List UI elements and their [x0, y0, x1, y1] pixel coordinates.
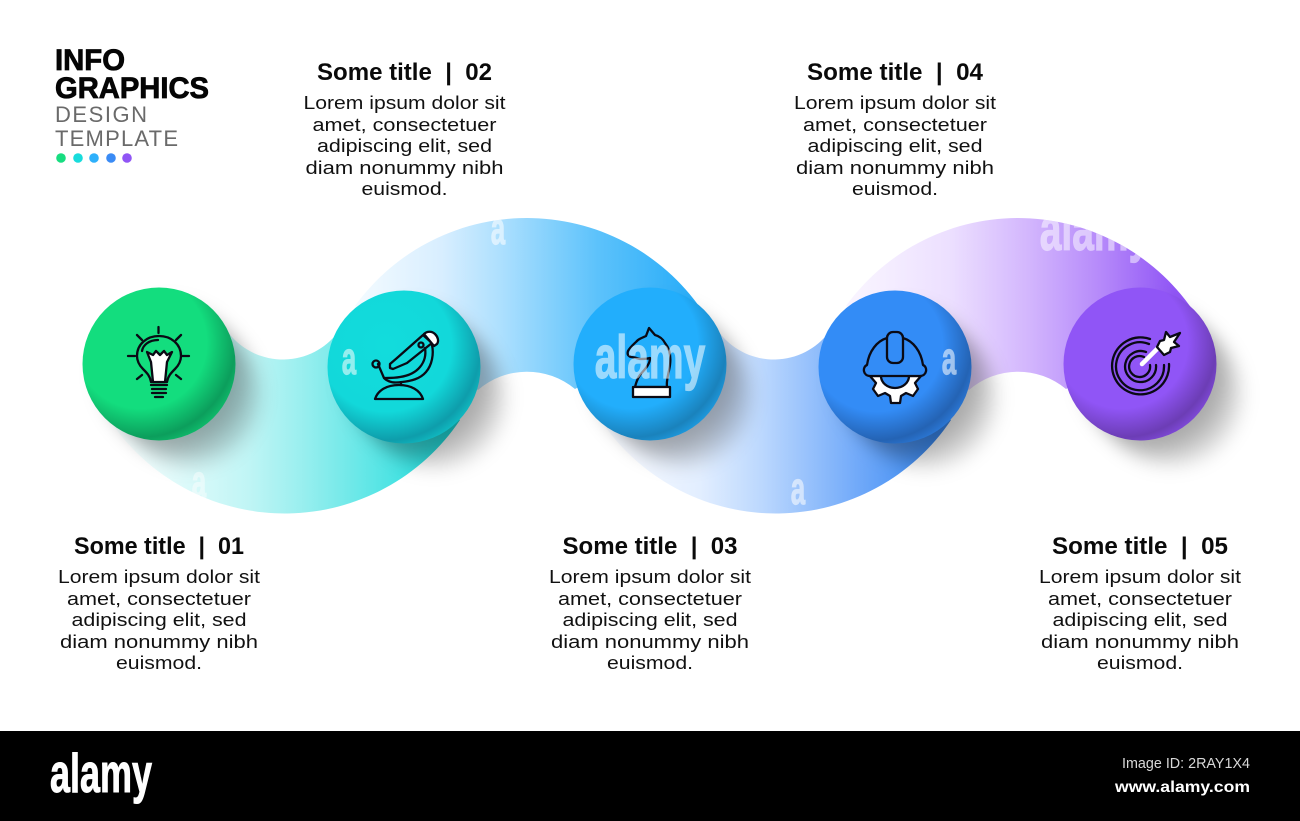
colour dots — [56, 153, 132, 163]
step text 01: euismod. — [116, 653, 202, 673]
watermark overlays: alamy — [595, 323, 705, 391]
step text 01: Lorem ipsum dolor sit — [58, 567, 260, 587]
step text 01: Some title | 01 — [74, 533, 244, 560]
step text 04: Lorem ipsum dolor sit — [794, 93, 996, 113]
step 3 circle with chess knight — [574, 288, 726, 440]
step text 05 — [1039, 533, 1241, 673]
step text 02: amet, consectetuer — [312, 115, 496, 135]
step text 04: adipiscing elit, sed — [808, 136, 982, 156]
step 2 circle with microscope — [328, 290, 480, 444]
icon: helmet and gear — [864, 332, 926, 403]
step text 01: diam nonummy nibh — [60, 632, 258, 652]
step text 05: Some title | 05 — [1052, 533, 1228, 560]
step text 02: Lorem ipsum dolor sit — [304, 93, 506, 113]
wave band 4 purple — [846, 218, 1196, 390]
step text 01 — [58, 533, 260, 673]
step text 03: amet, consectetuer — [558, 589, 742, 609]
step 1 circle with lightbulb — [82, 288, 236, 440]
wave band 2 light blue — [355, 218, 705, 390]
step text 03: euismod. — [607, 653, 693, 673]
footer logo: alamy — [50, 742, 152, 804]
heading: INFO GRAPHICS — [55, 44, 209, 105]
footer bar — [0, 731, 1300, 821]
step text 02: diam nonummy nibh — [306, 158, 504, 178]
image id: Image ID: 2RAY1X4 — [1122, 756, 1250, 772]
step text 03: adipiscing elit, sed — [562, 610, 738, 630]
subheading: DESIGN TEMPLATE: DESIGN — [55, 102, 147, 127]
step text 01: adipiscing elit, sed — [72, 610, 246, 630]
step text 03: diam nonummy nibh — [551, 632, 749, 652]
watermark overlays: a — [342, 333, 357, 384]
icon: chess knight — [628, 328, 670, 397]
circle shadows — [97, 302, 1242, 469]
watermark overlays — [192, 220, 1140, 506]
icon: microscope — [372, 332, 438, 399]
header: infographics design template — [55, 44, 209, 163]
heading: INFO GRAPHICS: INFO — [55, 44, 125, 77]
wave band 1 teal — [113, 328, 460, 513]
watermark overlays: a — [192, 456, 207, 507]
step text 03 — [549, 533, 751, 673]
step text 04 — [794, 59, 996, 199]
step text 05: diam nonummy nibh — [1041, 632, 1239, 652]
step text 05: amet, consectetuer — [1048, 589, 1232, 609]
step text 04: amet, consectetuer — [803, 115, 987, 135]
step text 02: euismod. — [362, 179, 448, 199]
watermark overlays: a — [791, 463, 806, 514]
step text 04: Some title | 04 — [807, 59, 984, 86]
step 5 circle with target — [1064, 288, 1216, 440]
step text 02 — [304, 59, 506, 199]
step 4 circle with helmet and gear — [818, 290, 972, 444]
step text 03: Some title | 03 — [562, 533, 738, 560]
step text 01: amet, consectetuer — [67, 589, 251, 609]
step text 05: Lorem ipsum dolor sit — [1039, 567, 1241, 587]
heading: INFO GRAPHICS: GRAPHICS — [55, 72, 209, 105]
icon: target with arrow — [1112, 332, 1180, 394]
step text 05: euismod. — [1097, 653, 1183, 673]
watermark overlays: a — [942, 333, 957, 384]
watermark overlays: alamy — [1040, 195, 1150, 263]
watermark overlays: a — [491, 203, 506, 254]
icon: lightbulb — [128, 327, 189, 397]
step text 05: adipiscing elit, sed — [1052, 610, 1228, 630]
wave band 3 blue — [604, 328, 951, 513]
step text 04: euismod. — [852, 179, 938, 199]
step text 03: Lorem ipsum dolor sit — [549, 567, 751, 587]
step text 04: diam nonummy nibh — [796, 158, 994, 178]
step text 02: adipiscing elit, sed — [317, 136, 492, 156]
subheading: DESIGN TEMPLATE: TEMPLATE — [55, 126, 178, 151]
subheading: DESIGN TEMPLATE — [55, 102, 178, 151]
website: www.alamy.com — [1114, 779, 1250, 796]
step text 02: Some title | 02 — [317, 59, 492, 86]
